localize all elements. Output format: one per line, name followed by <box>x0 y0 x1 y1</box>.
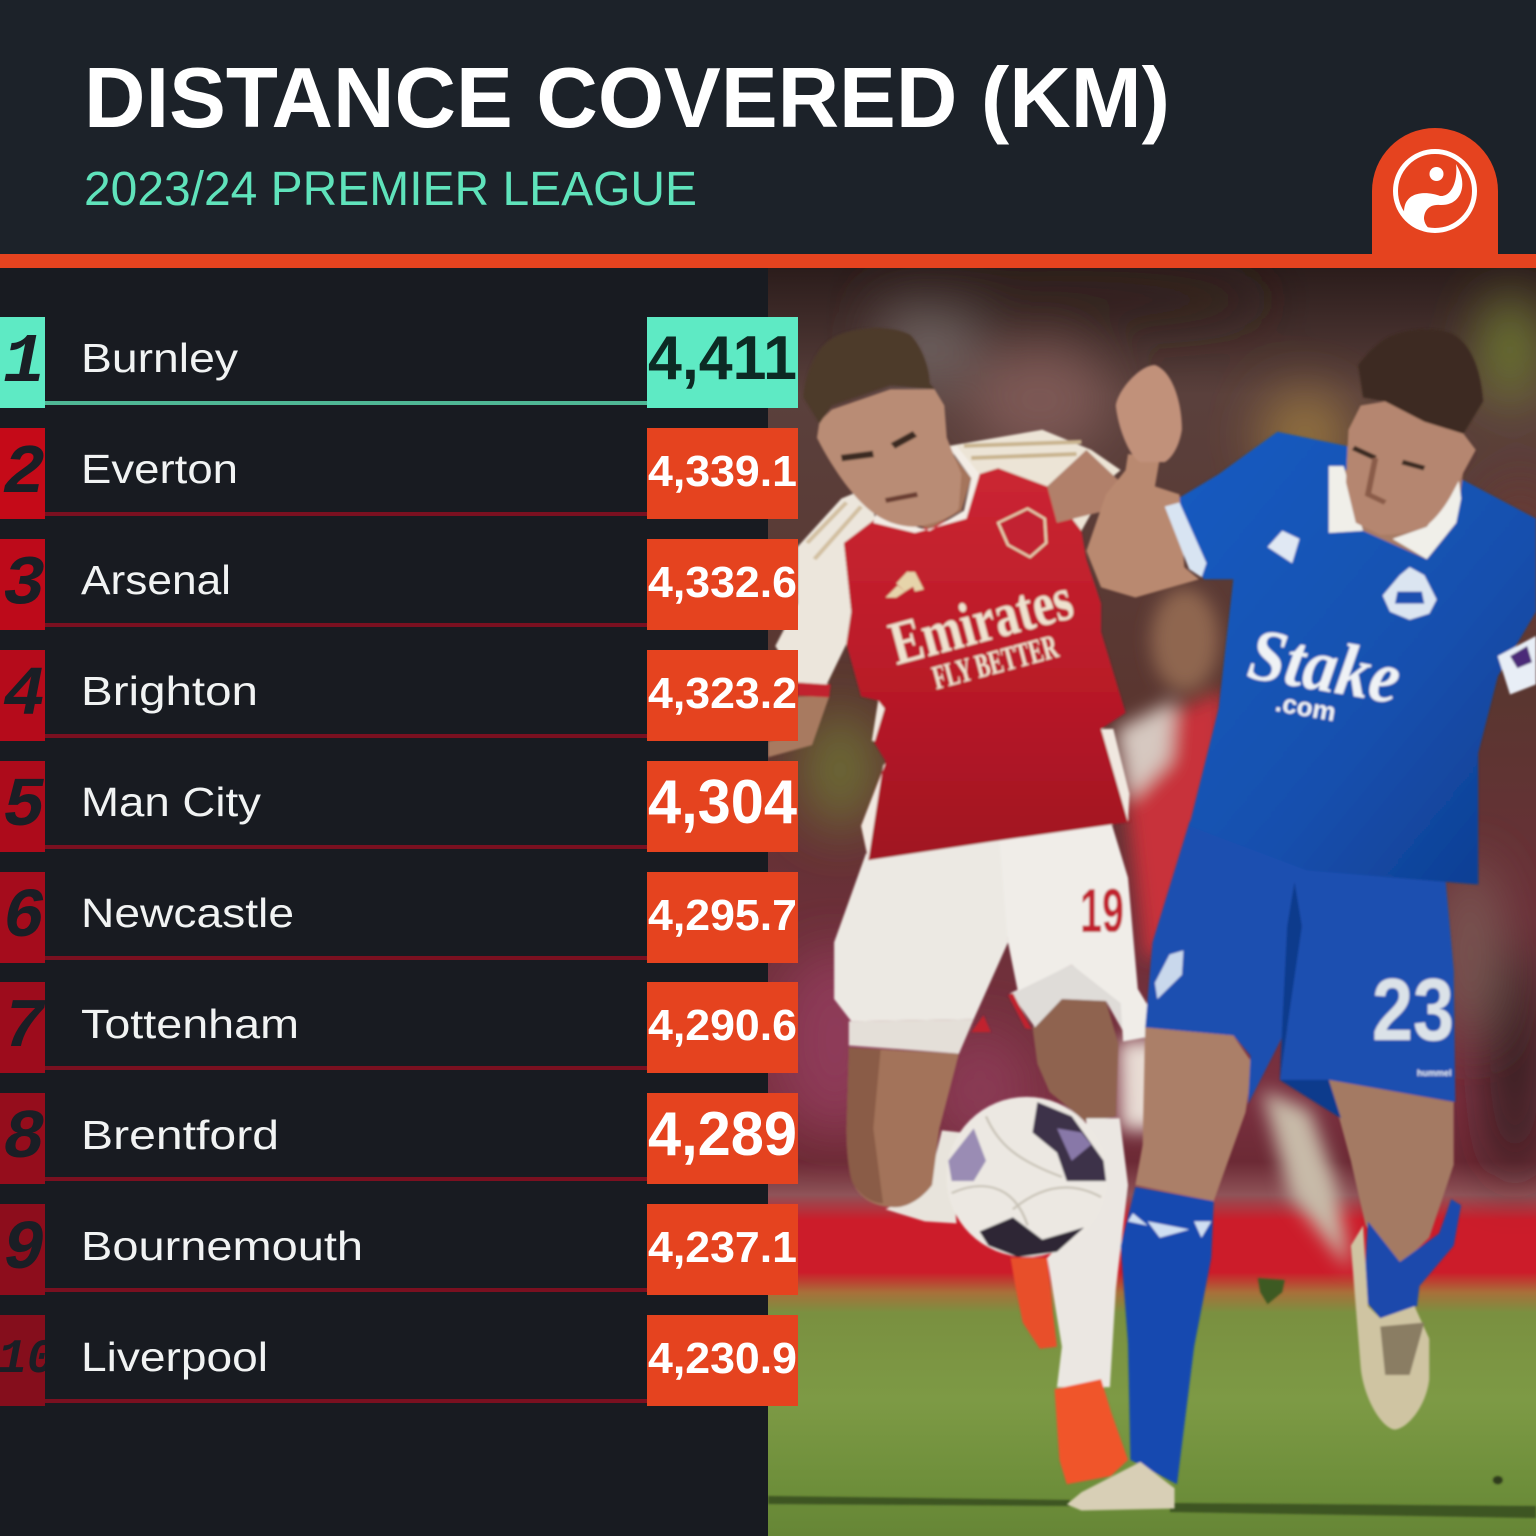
bent thigh and knee <box>846 1048 959 1207</box>
ranking table <box>0 317 798 1406</box>
Arsenal upper body <box>768 328 1130 860</box>
Everton lower body <box>1067 821 1461 1510</box>
row 8: Brentford: Brentford <box>81 1112 279 1158</box>
row 3: Arsenal: 3 <box>3 546 45 625</box>
row 2: Everton: 4,339.1 <box>648 447 797 496</box>
shorts brand: hummel <box>1417 1068 1452 1078</box>
face <box>817 389 961 527</box>
row 5: Man City: Man City <box>81 779 262 825</box>
Arsenal lower body <box>834 821 1148 1484</box>
row 2: Everton: Everton <box>81 446 238 492</box>
shirt sponsor: FLY BETTER <box>929 628 1062 697</box>
shirt sponsor <box>885 588 1076 692</box>
front boot <box>1067 1462 1175 1510</box>
lower arm <box>768 697 829 757</box>
standing leg sock <box>1047 1118 1128 1387</box>
bent leg sock <box>886 1130 961 1223</box>
shorts number 23: 23 <box>1372 960 1454 1059</box>
brand stripes <box>886 571 924 598</box>
title: DISTANCE COVERED (KM) <box>84 51 1170 146</box>
neck <box>920 457 972 529</box>
row 9: Bournemouth: 9 <box>3 1211 45 1290</box>
front orange boot <box>1055 1379 1128 1484</box>
club crest <box>1383 567 1437 620</box>
shirt sponsor: Stake <box>1243 613 1407 720</box>
row 3: Arsenal: Arsenal <box>81 557 231 603</box>
row 10: Liverpool <box>0 1315 798 1406</box>
row 10: Liverpool: 4,230.9 <box>648 1334 797 1383</box>
front sock <box>1121 1187 1214 1484</box>
row 5: Man City <box>0 761 798 852</box>
collar <box>1329 466 1461 559</box>
back sock <box>1363 1199 1461 1318</box>
shorts under-layer <box>849 1019 974 1054</box>
orange header rule <box>0 254 1536 268</box>
row 2: Everton: 2 <box>3 435 45 514</box>
row 6: Newcastle: 6 <box>3 879 45 958</box>
row 6: Newcastle: 4,295.7 <box>648 891 797 940</box>
hair <box>1358 329 1483 434</box>
row 8: Brentford: 4,289 <box>648 1100 797 1169</box>
row 4: Brighton <box>0 650 798 741</box>
red shirt body <box>844 468 1130 860</box>
white left sleeve <box>775 488 878 684</box>
row 5: Man City: 4,304 <box>648 768 797 837</box>
row 4: Brighton: 4,323.2 <box>648 669 797 718</box>
football <box>946 1097 1107 1257</box>
hair <box>803 328 935 424</box>
row 3: Arsenal <box>0 539 798 630</box>
row 1: Burnley: 1 <box>3 324 45 403</box>
grass shadow <box>768 1496 1536 1518</box>
face <box>1346 401 1476 535</box>
subtitle: 2023/24 PREMIER LEAGUE <box>84 163 697 216</box>
row 8: Brentford: 8 <box>3 1100 45 1179</box>
sleeve cuff <box>1165 502 1206 577</box>
row 4: Brighton: 4 <box>3 657 45 736</box>
shirt sponsor: Emirates <box>883 565 1080 678</box>
row 9: Bournemouth <box>0 1204 798 1295</box>
front leg skin <box>1135 1027 1253 1201</box>
raised arm <box>1086 454 1199 598</box>
row 7: Tottenham: 7 <box>3 989 46 1068</box>
row 1: Burnley: 4,411 <box>648 324 797 393</box>
row 1: Burnley <box>0 317 798 408</box>
header background <box>0 0 1536 254</box>
row 6: Newcastle: Newcastle <box>81 890 294 936</box>
grass debris <box>1258 1278 1503 1484</box>
crest <box>998 509 1046 557</box>
row 7: Tottenham: Tottenham <box>81 1001 299 1047</box>
hummel logo <box>1268 531 1299 563</box>
row 6: Newcastle <box>0 872 798 963</box>
row 1: Burnley: Burnley <box>81 335 239 381</box>
gripping hand <box>1047 450 1121 523</box>
logo badge <box>1372 128 1498 256</box>
list panel background <box>0 268 768 1536</box>
shirt sponsor: .com <box>1273 687 1338 727</box>
blurred background player <box>1116 588 1350 1270</box>
standing leg skin <box>1032 999 1118 1122</box>
photo: two players contesting the ball <box>768 268 1536 1536</box>
row 4: Brighton: Brighton <box>81 668 258 714</box>
back leg skin <box>1329 1080 1454 1266</box>
fist <box>1116 365 1182 462</box>
badge tab <box>1372 128 1498 256</box>
photo background: stadium, ad boards and pitch <box>768 268 1536 1536</box>
row 10: Liverpool: Liverpool <box>81 1334 268 1380</box>
row 9: Bournemouth: 4,237.1 <box>648 1223 797 1272</box>
Everton upper body <box>1086 329 1536 885</box>
row 8: Brentford <box>0 1093 798 1184</box>
back boot <box>1351 1225 1429 1430</box>
neck <box>1344 470 1464 559</box>
right shoulder <box>949 430 1121 531</box>
yin-yang icon <box>1396 152 1474 232</box>
shirt <box>1165 432 1536 885</box>
shorts <box>1145 821 1455 1118</box>
shirt number 19: 19 <box>1080 877 1124 946</box>
Arsenal player <box>768 328 1148 1484</box>
white shorts <box>834 821 1008 1021</box>
collar <box>873 446 980 533</box>
Everton player <box>1067 329 1536 1510</box>
row 7: Tottenham: 4,290.6 <box>648 1001 797 1050</box>
row 9: Bournemouth: Bournemouth <box>81 1223 363 1269</box>
row 7: Tottenham <box>0 982 798 1073</box>
row 2: Everton <box>0 428 798 519</box>
back orange boot <box>1010 1258 1057 1349</box>
row 3: Arsenal: 4,332.6 <box>648 558 797 607</box>
row 5: Man City: 5 <box>3 768 45 847</box>
shorts crest <box>1155 951 1183 999</box>
captain armband <box>1498 636 1536 695</box>
